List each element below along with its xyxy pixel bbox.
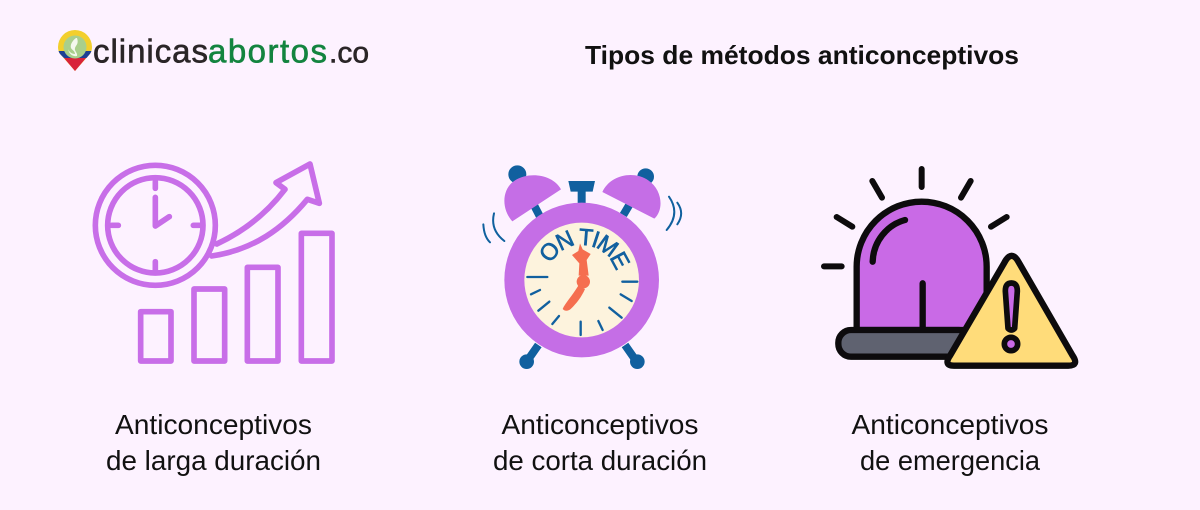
right bell xyxy=(602,175,661,219)
growth arrow xyxy=(212,164,319,256)
left bell xyxy=(504,175,561,221)
label: short-acting contraceptives xyxy=(493,409,707,476)
light rays xyxy=(824,169,1007,266)
siren base xyxy=(838,330,972,357)
icon: clock with rising bars and arrow xyxy=(95,164,332,361)
dome xyxy=(857,202,987,330)
dome highlights xyxy=(873,220,923,328)
clock hands xyxy=(563,243,591,311)
label: long-acting contraceptives xyxy=(106,409,321,476)
clock body xyxy=(504,203,659,357)
logo: clinicasabortos.co xyxy=(58,30,369,71)
icon: alarm clock on time xyxy=(482,165,682,369)
clock xyxy=(95,165,215,285)
hour ticks xyxy=(527,277,637,335)
label: short-acting contraceptives: de corta duración xyxy=(493,445,707,476)
label: emergency contraceptives: de emergencia xyxy=(860,445,1040,476)
bar 2 xyxy=(194,289,225,361)
vibration lines xyxy=(483,197,681,242)
bar 3 xyxy=(247,267,278,361)
label: emergency contraceptives xyxy=(852,409,1048,476)
bar 4 xyxy=(301,233,332,361)
bell stems and feet xyxy=(512,169,650,365)
bar 1 xyxy=(141,312,171,361)
icon: emergency siren with warning triangle xyxy=(824,169,1075,366)
icon: location pin with Colombian colours xyxy=(58,30,92,71)
exclamation mark xyxy=(1005,283,1017,330)
label: long-acting contraceptives: Anticonceptivos xyxy=(115,409,312,440)
label: short-acting contraceptives: Anticonceptivos xyxy=(502,409,698,440)
clock face xyxy=(524,223,639,337)
label: emergency contraceptives: Anticonceptivos xyxy=(852,409,1048,440)
logo: clinicasabortos.co: .co xyxy=(329,36,369,70)
logo wordmark: clinicas xyxy=(93,32,208,70)
logo: clinicasabortos.co: abortos xyxy=(208,32,327,70)
on time label: ON TIME xyxy=(540,228,630,271)
title: Tipos de métodos anticonceptivos xyxy=(585,40,1019,70)
warning triangle xyxy=(947,256,1075,366)
label: long-acting contraceptives: de larga duración xyxy=(106,445,321,476)
